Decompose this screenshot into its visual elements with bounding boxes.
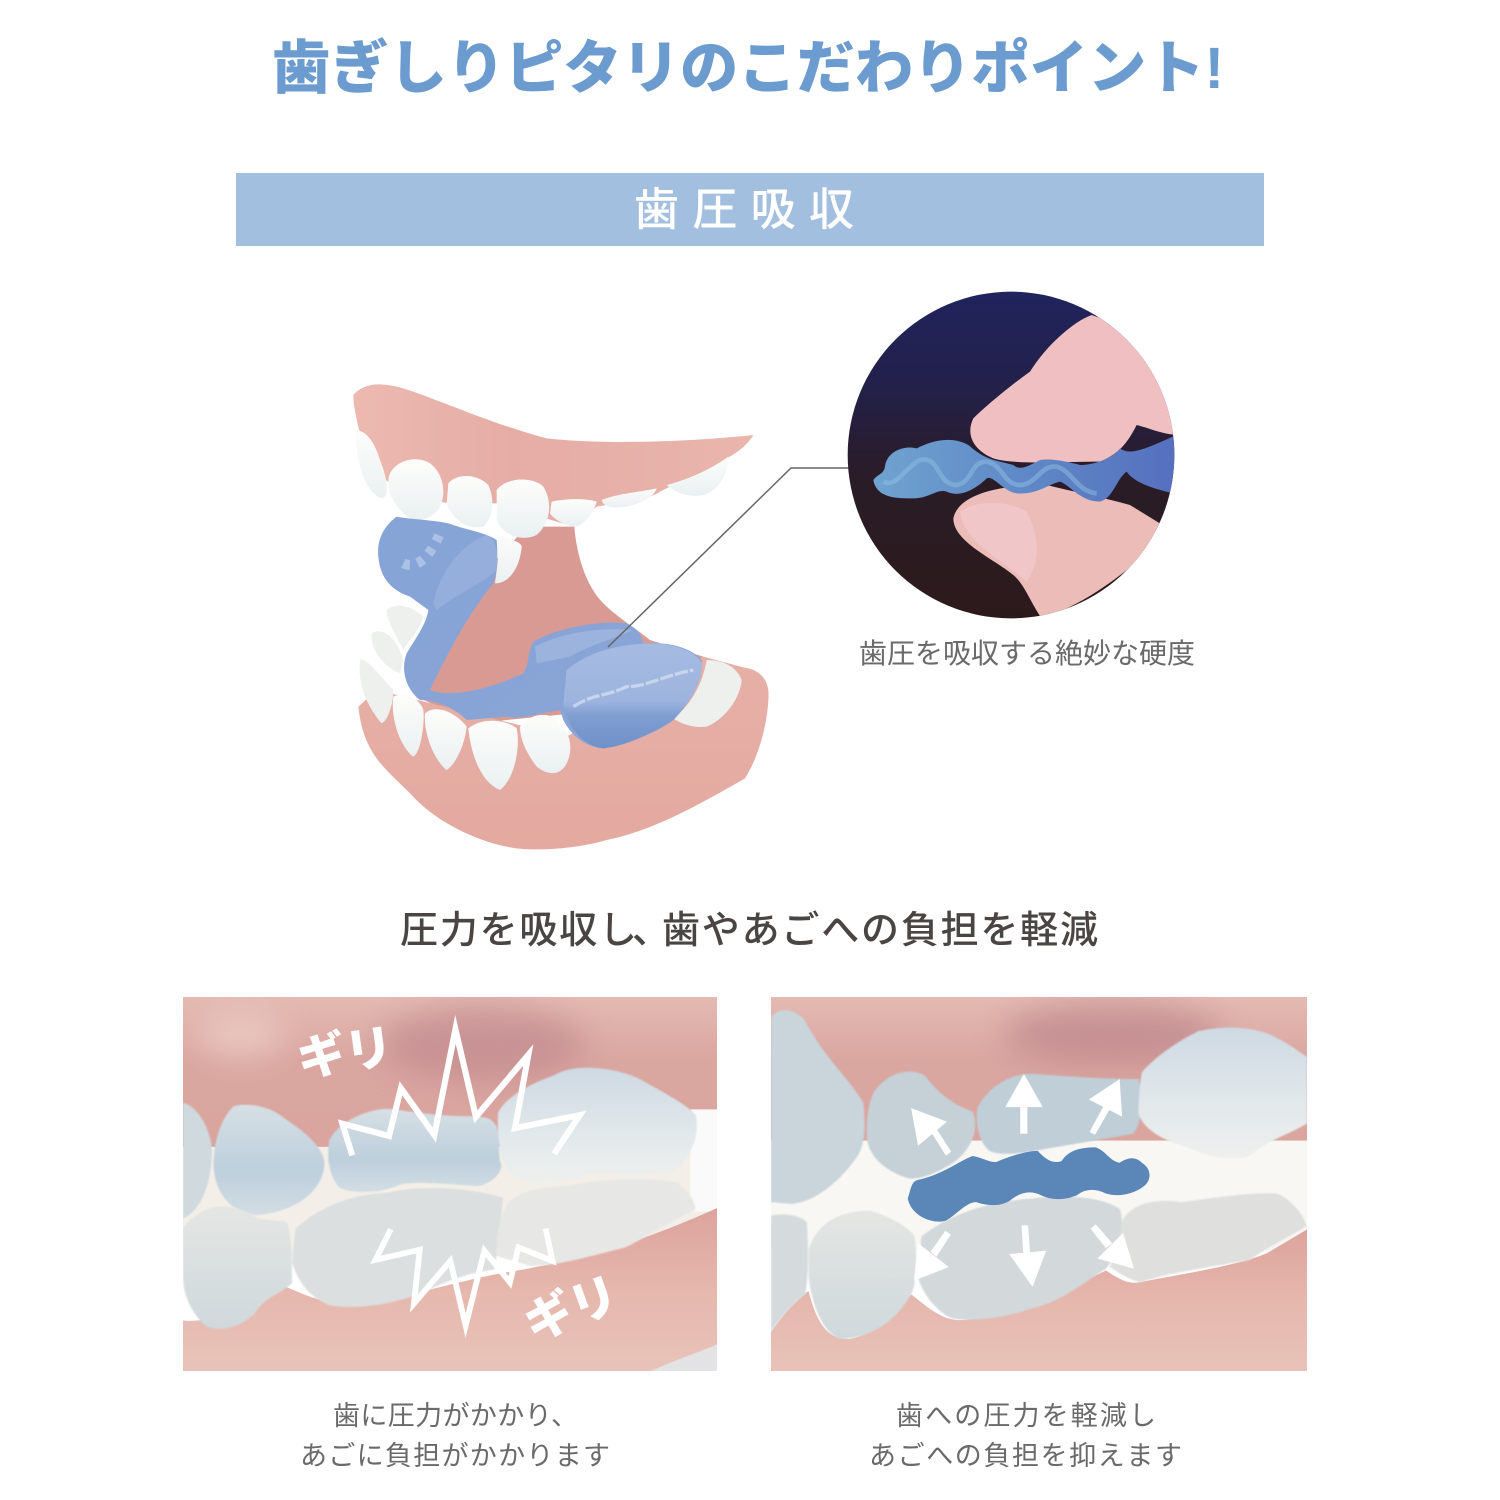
gap between teeth	[183, 1147, 717, 1256]
lower gum	[771, 1229, 1307, 1381]
caption: right photo: 歯への圧力を軽減し	[896, 1401, 1156, 1431]
lower finger	[953, 485, 1173, 618]
mouthpiece upper ridges	[403, 533, 440, 565]
caption: left photo: あごに負担がかかります	[300, 1441, 610, 1471]
arrow up-right	[1089, 1079, 1122, 1135]
white arrows	[911, 1074, 1134, 1287]
upper teeth	[771, 1010, 1307, 1204]
gum shading	[381, 1007, 585, 1082]
impact burst top	[342, 1029, 580, 1155]
thumbnail	[960, 503, 1037, 582]
lower teeth	[771, 1193, 1307, 1339]
illustration: dental model with mouthpiece	[353, 384, 769, 849]
subheading: 歯やあごへの負担を軽減	[662, 910, 1098, 952]
upper teeth	[183, 1068, 697, 1218]
title: 歯ぎしりピタリのこだわりポイント!	[272, 36, 1224, 101]
lower back teeth	[359, 606, 742, 727]
mouthpiece held	[873, 433, 1180, 502]
lower gum body	[358, 657, 769, 849]
upper gum	[771, 997, 1307, 1141]
upper finger	[970, 315, 1180, 462]
right gap	[690, 1109, 717, 1212]
lower teeth	[183, 1179, 696, 1329]
section banner	[236, 173, 1264, 246]
arrow down-right	[1091, 1224, 1134, 1269]
bottom right grey corner	[652, 1344, 717, 1371]
subheading: 圧力を吸収し	[400, 910, 637, 952]
subheading: 、	[632, 910, 670, 952]
caption: right photo: あごへの負担を抑えます	[869, 1441, 1182, 1471]
mouthpiece lower pad	[563, 643, 702, 748]
label: giri bottom: ギリ	[518, 1269, 626, 1351]
mouthpiece upper pad	[433, 535, 497, 610]
photo: teeth with mouthpiece	[771, 997, 1307, 1381]
leader line	[608, 468, 852, 647]
photo: grinding teeth without mouthpiece	[183, 997, 717, 1379]
photo: fingers holding mouthpiece	[840, 285, 1180, 625]
upper gum	[353, 384, 753, 527]
upper teeth	[355, 430, 728, 583]
arrow down	[1009, 1225, 1046, 1287]
subheading	[400, 910, 1098, 952]
gap between teeth	[771, 1141, 1307, 1250]
lower gum	[183, 1208, 717, 1379]
caption: hardness: 歯圧を吸収する絶妙な硬度	[859, 638, 1195, 669]
mouthpiece mid highlight	[535, 629, 633, 663]
caption: right photo	[869, 1401, 1182, 1471]
label: giri top: ギリ	[294, 1021, 397, 1087]
section banner: 歯圧吸収	[634, 184, 854, 235]
mouthpiece lower ridge	[573, 670, 693, 707]
gum highlight	[197, 1011, 285, 1058]
arrow up-left	[911, 1108, 951, 1156]
caption: left photo	[300, 1401, 610, 1471]
mouthpiece wave highlight	[883, 459, 1097, 493]
arrow down-left	[914, 1231, 951, 1281]
throat and tongue	[417, 527, 703, 723]
arrow up	[1005, 1074, 1043, 1134]
mouthpiece	[378, 517, 702, 748]
mouthpiece cross-section	[908, 1147, 1150, 1222]
caption: left photo: 歯に圧力がかかり、	[333, 1401, 578, 1431]
lower front teeth	[393, 695, 570, 790]
impact burst bottom	[375, 1229, 553, 1326]
upper gum	[183, 997, 717, 1147]
gum shading	[1003, 1004, 1222, 1065]
